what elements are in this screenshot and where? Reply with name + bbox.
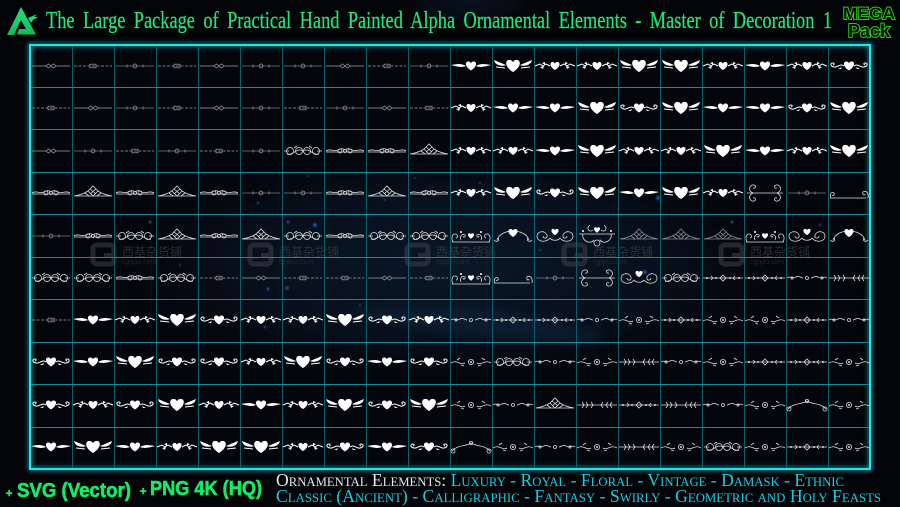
format label: png: + [140, 486, 146, 498]
watermarks: 西基杂货铺 [122, 244, 182, 259]
row 2 ornaments [32, 102, 868, 114]
watermarks: cgqou.com [122, 259, 156, 266]
categories line 2: Classic (Ancient) - Calligraphic - Fantasy - Swirly - Geometric and Holy Feasts [276, 486, 881, 507]
row 4 ornaments [32, 185, 868, 201]
badge: mega pack [843, 4, 895, 41]
row 1 ornaments [32, 60, 867, 72]
row 10 ornaments [31, 441, 869, 453]
format label: svg: SVG (Vector) [17, 480, 131, 502]
grid panel [30, 45, 870, 469]
categories line 1: Ornamental Elements: Luxury - Royal - Floral - Vintage - Damask - Ethnic [276, 470, 844, 490]
logo [7, 7, 38, 35]
row 9 ornaments [33, 398, 869, 411]
row 6 ornaments [32, 270, 869, 286]
row 3 ornaments [32, 144, 868, 157]
row 8 ornaments [33, 356, 869, 368]
row 5 ornaments [32, 225, 868, 246]
watermarks [93, 244, 810, 266]
format label: svg: + [6, 488, 12, 500]
format label: png: PNG 4K (HQ) [150, 478, 262, 500]
row 7 ornaments [32, 314, 869, 326]
badge: mega pack: MEGA [843, 4, 895, 23]
badge: mega pack: Pack [848, 21, 891, 41]
